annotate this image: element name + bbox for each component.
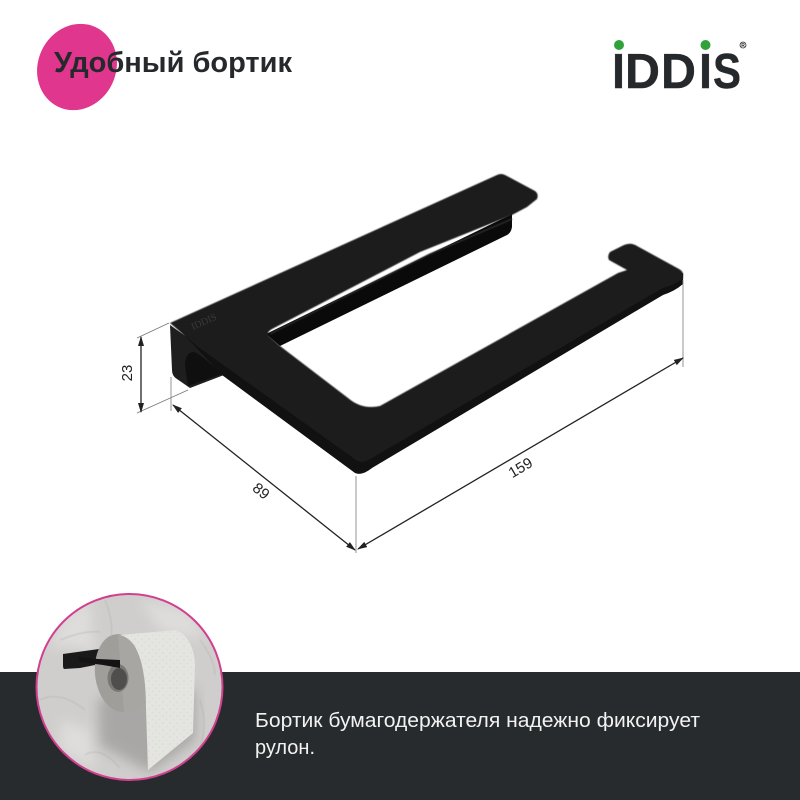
logo: IDDIS: I [612,45,625,99]
logo: IDDIS: S [713,45,741,99]
marble veins [40,600,215,768]
dimension 23 [119,323,188,413]
holder wall highlight [270,219,512,334]
dimension 89 [171,377,355,550]
holder arm in hole [95,658,120,668]
logo: IDDIS: I [699,45,712,99]
roll shadow [98,680,195,772]
roll body [94,634,124,712]
logo: IDDIS: D [625,45,660,99]
dimension 159: 159 [506,454,536,482]
marble background [36,594,222,780]
dimension 23: 23 [119,365,136,381]
holder leg arch [185,352,222,386]
logo: IDDIS: D [661,45,696,99]
holder bracket [63,649,100,669]
pink title blob [23,11,131,123]
logo: IDDIS [612,40,746,99]
product: black paper holder [170,174,683,474]
circle border [36,594,222,780]
dark bottom band [0,672,800,800]
paper emboss pattern [124,632,194,766]
holder leg side [170,325,224,388]
marble light patches [55,604,198,762]
holder top face [170,174,683,462]
title: Удобный бортик [54,47,293,79]
holder underside rim [175,273,683,474]
photo: roll on holder in circle [36,594,222,780]
body text: рулон. [255,737,315,759]
logo: IDDIS: R [741,43,745,49]
body text [255,710,700,759]
engraved brand on holder: IDDIS [190,312,219,333]
dimension 159 [356,280,683,553]
holder wall under the upper arm [266,214,512,346]
roll hole [108,664,128,692]
body text: Бортик бумагодержателя надежно фиксирует [255,710,700,732]
paper sheet [120,630,195,770]
dimension 89: 89 [249,480,273,503]
